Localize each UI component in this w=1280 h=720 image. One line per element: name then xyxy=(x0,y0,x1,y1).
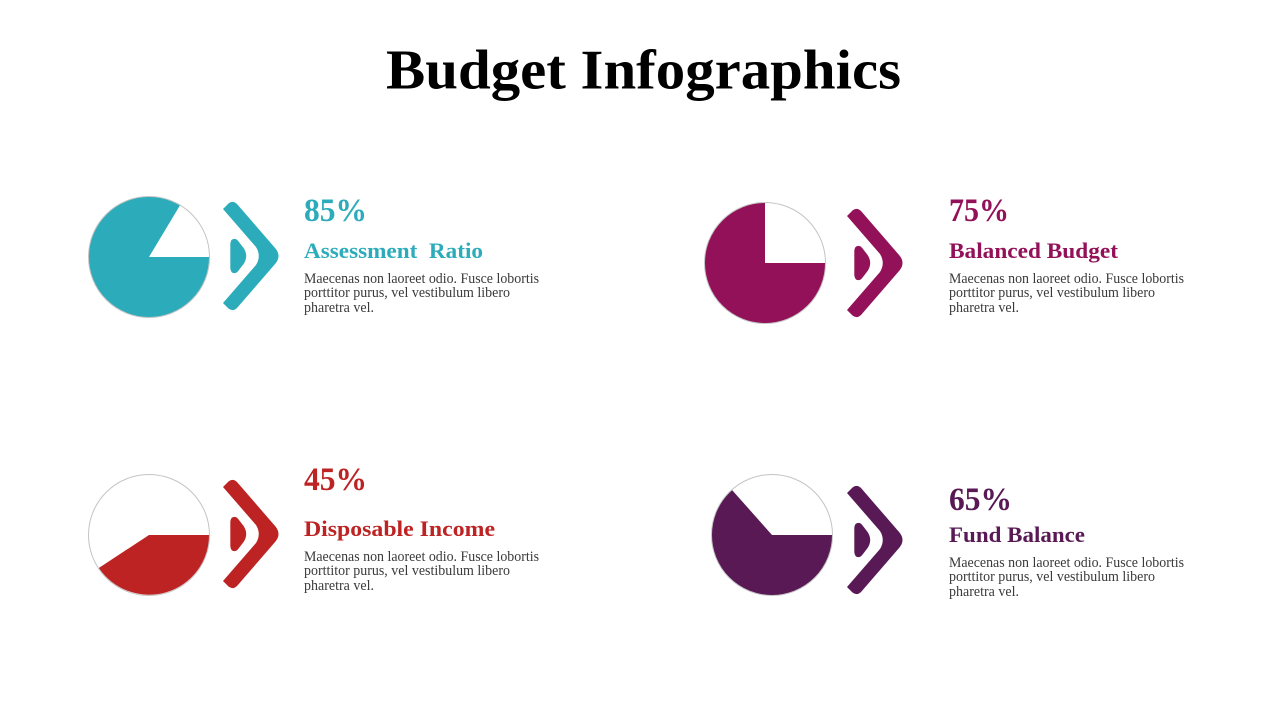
text block: porttitor purus, vel vestibulum libero xyxy=(304,285,510,301)
text block xyxy=(949,555,1184,600)
text block: pharetra vel. xyxy=(304,300,374,316)
text block: pharetra vel. xyxy=(949,300,1019,316)
panel: disposable income xyxy=(88,462,539,596)
value: 85%: 85% xyxy=(304,193,367,229)
panel: assessment ratio xyxy=(88,193,539,318)
icon: chevron arrow xyxy=(223,480,278,588)
text block: Maecenas non laoreet odio. Fusce lobortis xyxy=(949,271,1184,287)
pie chart: 85% xyxy=(88,196,210,318)
icon: chevron arrow xyxy=(223,202,278,310)
text block: Maecenas non laoreet odio. Fusce lobortis xyxy=(304,271,539,287)
icon: chevron arrow xyxy=(847,486,902,594)
text block xyxy=(304,549,539,594)
text block xyxy=(304,271,539,316)
text block: pharetra vel. xyxy=(949,584,1019,600)
text block: Maecenas non laoreet odio. Fusce lobortis xyxy=(304,549,539,565)
pie chart: 65% xyxy=(712,474,832,596)
text block: porttitor purus, vel vestibulum libero xyxy=(949,569,1155,585)
panel: balanced budget xyxy=(704,193,1184,324)
icon: chevron arrow xyxy=(847,209,902,317)
text block: Maecenas non laoreet odio. Fusce lobortis xyxy=(949,555,1184,571)
text block: pharetra vel. xyxy=(304,578,374,594)
text block: porttitor purus, vel vestibulum libero xyxy=(304,563,510,579)
text block: porttitor purus, vel vestibulum libero xyxy=(949,285,1155,301)
title: Budget Infographics xyxy=(386,40,901,102)
heading: assessment ratio: Assessment Ratio xyxy=(304,238,483,263)
pie chart: 45% xyxy=(88,474,210,596)
pie chart: 75% xyxy=(704,202,826,324)
value: 65%: 65% xyxy=(949,482,1012,518)
text block xyxy=(949,271,1184,316)
heading: disposable income: Disposable Income xyxy=(304,516,495,541)
heading: balanced budget: Balanced Budget xyxy=(949,238,1119,263)
heading: fund balance: Fund Balance xyxy=(949,522,1085,547)
value: 75%: 75% xyxy=(949,193,1009,229)
value: 45%: 45% xyxy=(304,462,367,498)
panel: fund balance xyxy=(712,474,1184,600)
